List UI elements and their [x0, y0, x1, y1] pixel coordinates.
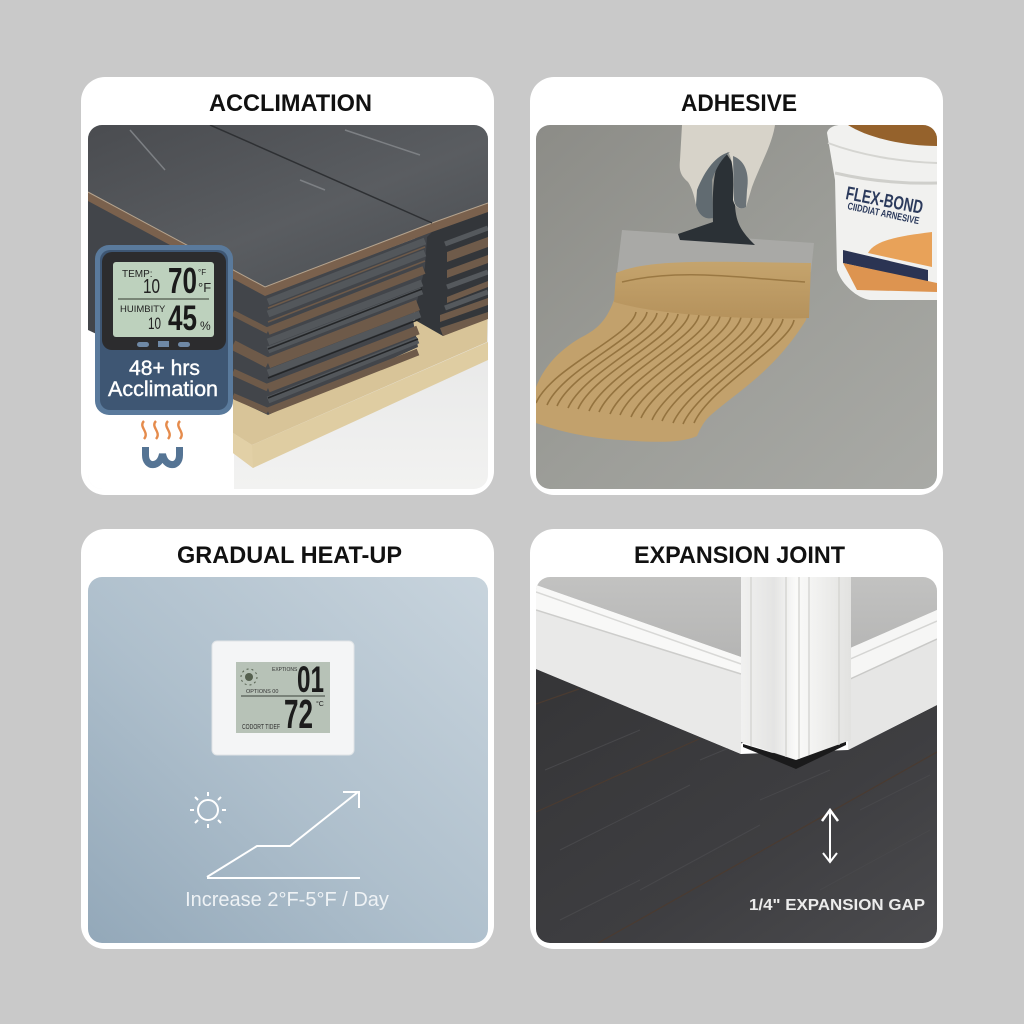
lcd screen: OPTIONS 00	[246, 689, 278, 695]
panel: gradual heat-up	[81, 529, 494, 949]
trowel blade	[617, 230, 814, 272]
adhesive bucket: CIIDDIAT ARNESIVE	[846, 201, 920, 227]
ribbed adhesive	[536, 300, 806, 442]
lcd screen: 45	[168, 299, 197, 338]
icon: sun	[190, 792, 226, 828]
photo: baseboard and floor	[536, 577, 937, 943]
tile top surface	[88, 125, 488, 287]
dark floor	[536, 669, 937, 943]
lcd screen: TEMP:	[122, 269, 153, 280]
panel: acclimation	[81, 77, 494, 495]
icon: thermo-hygrometer: 48+ hrs	[129, 357, 200, 380]
lcd screen: CODORT TIDEF	[242, 724, 280, 731]
adhesive bucket	[827, 125, 937, 300]
lcd screen: %	[200, 319, 211, 333]
photo: stacked tiles	[88, 125, 488, 489]
caption: expansion gap: 1/4" EXPANSION GAP	[749, 897, 925, 914]
photo: trowel and adhesive	[536, 125, 937, 489]
icon: thermo-hygrometer: Acclimation	[108, 378, 218, 401]
lcd screen	[113, 260, 214, 338]
icon: gap arrow	[822, 810, 838, 862]
lcd screen: °F	[198, 268, 206, 277]
main tile stack	[88, 195, 432, 415]
device buttons	[137, 341, 190, 347]
lcd screen: 10	[148, 314, 161, 333]
lcd screen: °C	[316, 700, 324, 708]
right baseboard	[848, 610, 937, 750]
heading: adhesive: ADHESIVE	[681, 90, 797, 117]
lcd screen: 10	[143, 276, 160, 298]
photo background	[88, 577, 488, 943]
caption: rate of increase: Increase 2°F-5°F / Day	[185, 889, 389, 911]
adhesive bucket: FLEX-BOND	[844, 183, 925, 219]
floor seams and grain	[536, 689, 937, 943]
icon: heat waves	[142, 421, 182, 439]
wood plank	[233, 300, 488, 468]
icon: thermo-hygrometer	[95, 245, 233, 415]
icon: humidity logo	[146, 447, 180, 465]
wall thermostat	[212, 641, 354, 755]
lcd screen: 01	[297, 659, 324, 700]
lcd screen: HUIMBITY	[120, 304, 166, 315]
lcd screen: 72	[284, 691, 313, 737]
heading: acclimation: ACCLIMATION	[209, 90, 372, 117]
lcd screen: EXPTIONS	[272, 667, 298, 673]
chart: rising temperature line	[207, 792, 360, 878]
column foot	[743, 740, 846, 769]
heading: expansion joint: EXPANSION JOINT	[634, 542, 845, 569]
lcd screen: 70	[168, 260, 197, 301]
white column	[741, 577, 851, 760]
panel: adhesive	[530, 77, 943, 495]
second tile stack	[415, 205, 488, 336]
heading: gradual heat-up: GRADUAL HEAT-UP	[177, 542, 402, 569]
trowel handle and glove	[678, 125, 775, 245]
left baseboard	[536, 585, 741, 754]
paste ridge	[614, 262, 811, 318]
panel: expansion joint	[530, 529, 943, 949]
lcd screen: °F	[198, 280, 211, 295]
lcd screen	[236, 659, 330, 737]
